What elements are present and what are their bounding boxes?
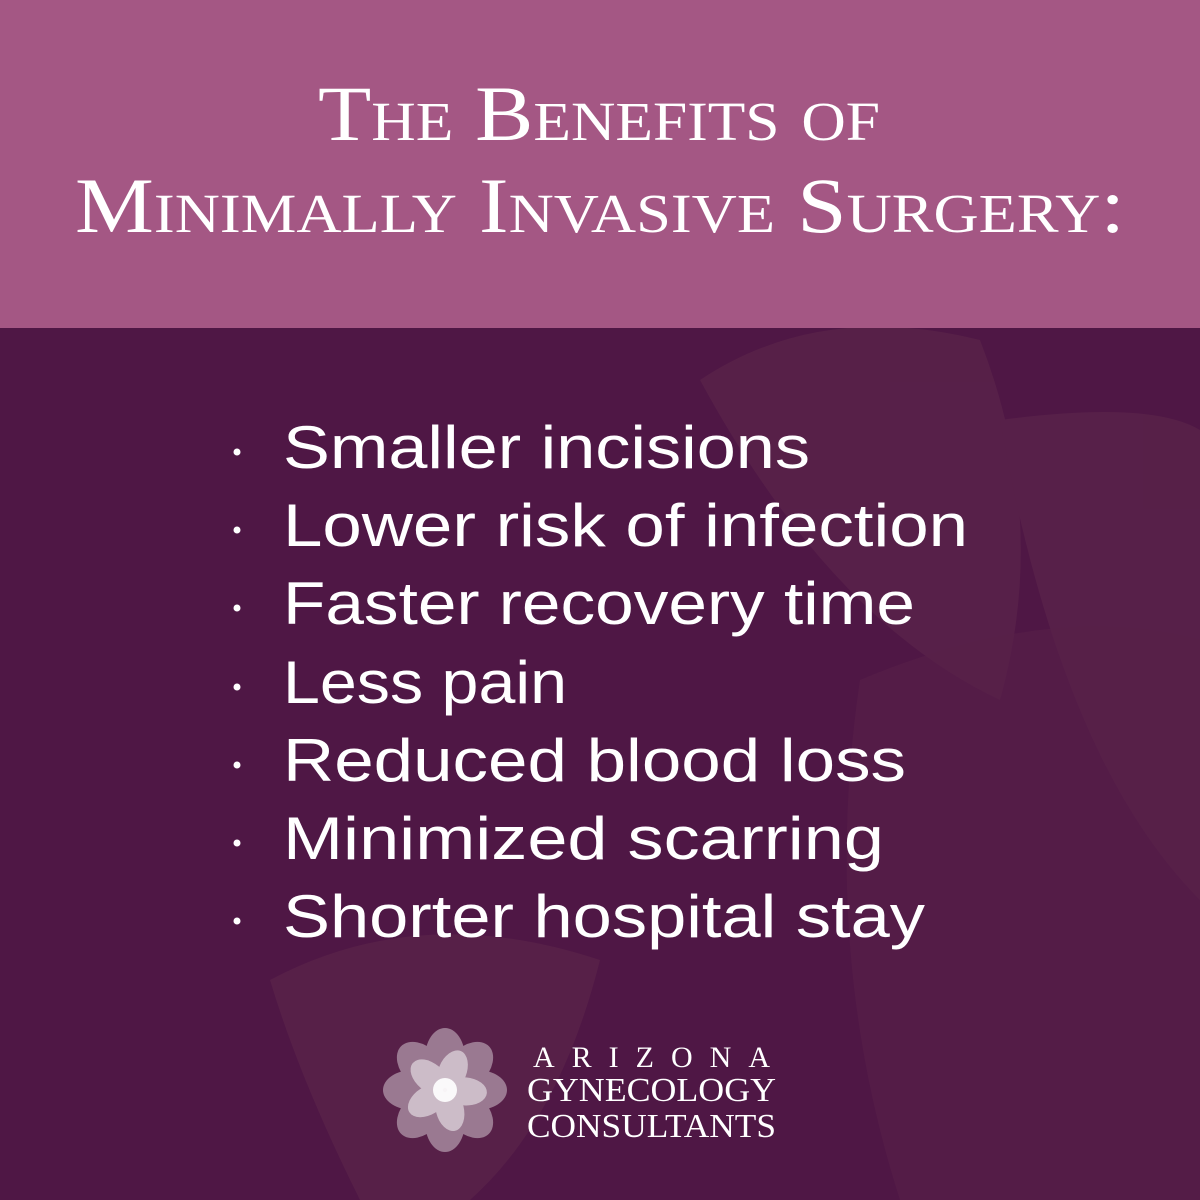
logo text — [527, 1041, 776, 1145]
logo text: GYNECOLOGY — [527, 1072, 776, 1109]
logo text: CONSULTANTS — [527, 1108, 776, 1145]
title — [75, 70, 1125, 249]
header band — [0, 0, 1200, 328]
benefits list: Minimized scarring — [283, 805, 884, 872]
decorative petals — [270, 327, 1200, 1200]
title: Minimally Invasive Surgery: — [75, 162, 1125, 249]
benefits list: Shorter hospital stay — [283, 883, 925, 950]
icon: flower — [383, 1028, 507, 1152]
logo — [383, 1028, 776, 1152]
benefits list: Lower risk of infection — [283, 492, 968, 559]
benefits list — [234, 414, 968, 950]
benefits list: Faster recovery time — [283, 570, 915, 637]
benefits list: Less pain — [283, 649, 567, 716]
benefits list: Smaller incisions — [283, 414, 810, 481]
title: The Benefits of — [318, 70, 880, 157]
benefits list: Reduced blood loss — [283, 727, 906, 794]
logo text: ARIZONA — [533, 1041, 770, 1074]
